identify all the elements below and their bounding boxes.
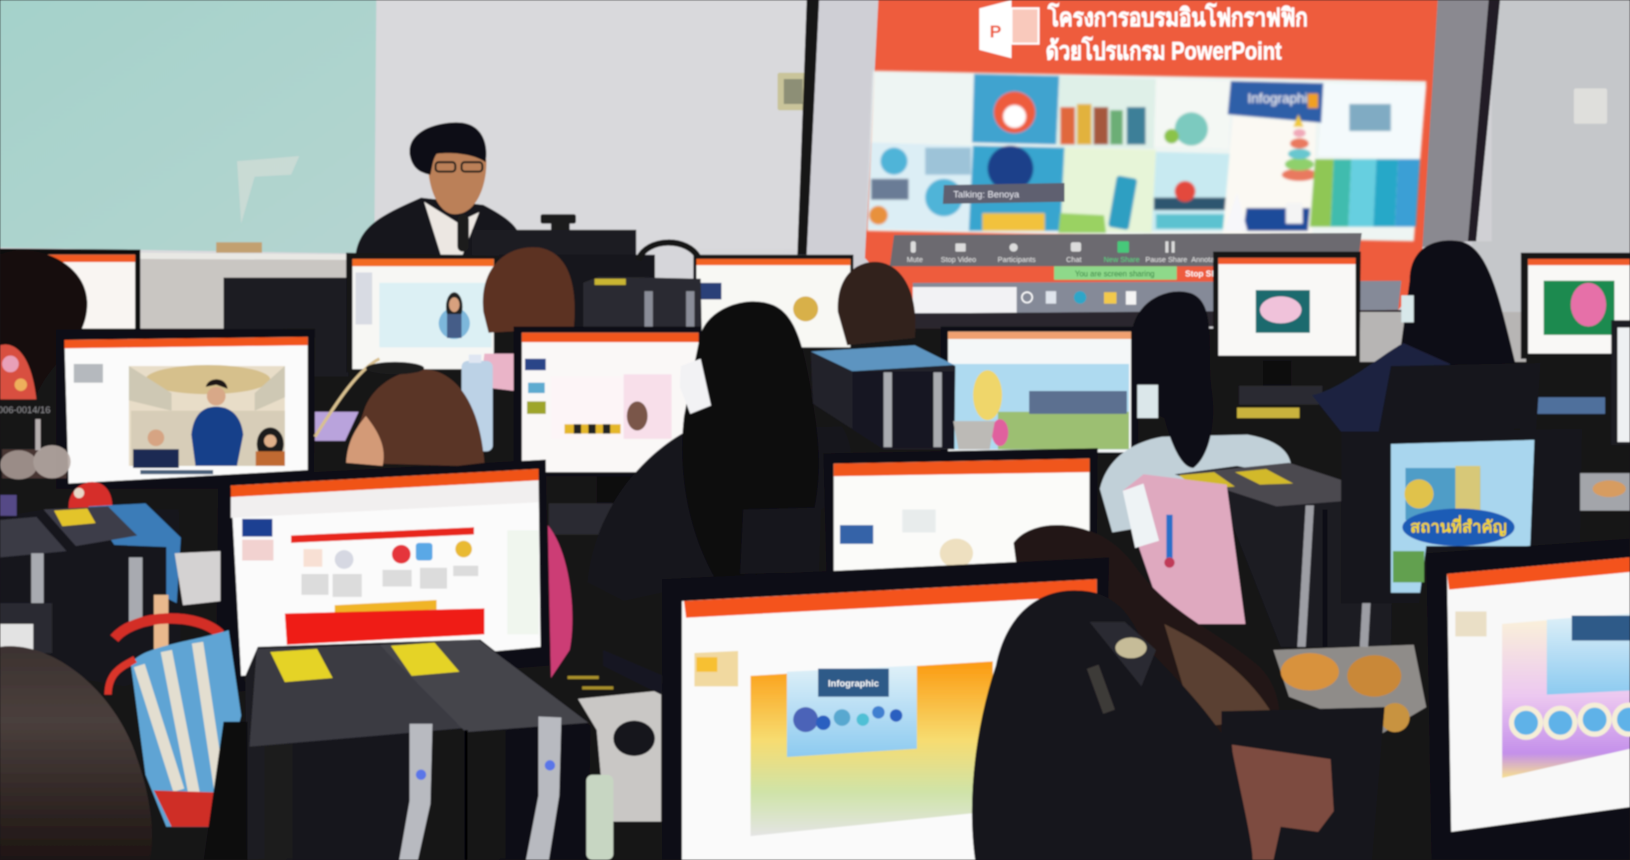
monitor centre with yellow barrier slide xyxy=(514,327,702,535)
pink sleeve xyxy=(548,525,572,678)
right-edge desk pastry xyxy=(1580,473,1630,511)
shirt xyxy=(424,202,479,255)
front woman with hair clip xyxy=(972,590,1253,860)
rear monitor left xyxy=(0,249,140,331)
chair behind front woman xyxy=(1221,707,1385,860)
Zoom meeting toolbar: Mute xyxy=(907,255,923,264)
woman with brown hair and sunglasses xyxy=(346,362,484,466)
monitor with Thai landmark slide: สถานที่สำคัญ xyxy=(1410,514,1507,537)
front centre monitor xyxy=(662,557,1109,860)
Zoom meeting toolbar: Stop Video xyxy=(941,255,976,264)
wall controller xyxy=(1574,88,1607,124)
computer tower behind centre monitor xyxy=(583,277,702,327)
wall thermostat xyxy=(778,73,806,110)
glasses xyxy=(436,162,482,172)
monitor with flight attendant image xyxy=(56,329,315,489)
monitor stand left of towers xyxy=(204,722,247,860)
hair xyxy=(409,122,486,175)
rear monitor centre xyxy=(693,255,853,354)
rear desk area shadow xyxy=(0,278,1630,860)
PowerPoint logo xyxy=(979,0,1039,58)
neck and face xyxy=(428,140,487,214)
woman seated at rear centre-left xyxy=(480,247,575,391)
projection screen surround xyxy=(797,0,1500,317)
woman in light-blue top with ponytail xyxy=(1100,291,1291,532)
drink cups and coffee xyxy=(0,419,71,479)
monitor with infographic icons xyxy=(216,460,549,692)
yellow floor tape xyxy=(568,676,613,689)
rear monitor right with flower xyxy=(1521,253,1630,445)
monitor with Thai landmark slide xyxy=(1341,428,1582,603)
computer towers centre xyxy=(811,345,955,449)
front right monitor xyxy=(1426,539,1630,860)
infographic collage xyxy=(867,71,1426,241)
screen sharing notice: Stop Share xyxy=(1185,269,1229,279)
woman at far left xyxy=(0,250,87,400)
suit xyxy=(356,198,520,256)
microphone xyxy=(457,214,469,252)
striped shopping bag xyxy=(108,595,241,827)
bag in mid-left xyxy=(315,359,379,441)
monitor with city collage xyxy=(941,327,1138,454)
Zoom meeting toolbar: Annotate xyxy=(1191,255,1220,264)
PowerPoint logo: P xyxy=(990,21,1002,41)
instructor xyxy=(356,122,520,256)
paper cup xyxy=(953,421,995,449)
computer towers mid-right xyxy=(1175,463,1393,647)
woman in black with long hair xyxy=(587,301,851,601)
slide title xyxy=(1046,2,1308,65)
water bottle xyxy=(462,355,493,451)
whiteboard xyxy=(0,0,376,260)
Zoom meeting toolbar xyxy=(890,233,1362,266)
computer towers far left xyxy=(0,495,181,686)
head foreground left xyxy=(0,646,152,860)
office chair right xyxy=(1378,363,1541,433)
woman with long hair behind front monitor xyxy=(1014,525,1279,749)
Zoom meeting toolbar: Pause Share xyxy=(1145,255,1187,264)
webcam and teacher monitor xyxy=(472,214,699,328)
desk surface and mouse xyxy=(578,690,661,860)
screen sharing notice xyxy=(1054,266,1229,280)
Zoom meeting toolbar: Chat xyxy=(1066,255,1082,264)
projected slide xyxy=(865,0,1438,314)
Windows taskbar on projection xyxy=(913,281,1401,314)
front centre monitor: Infographic xyxy=(828,678,879,688)
light pink parcel xyxy=(1123,474,1245,624)
Talking indicator xyxy=(943,183,1064,204)
rear monitor with lotus image xyxy=(1213,252,1361,418)
Zoom meeting toolbar: Participants xyxy=(998,255,1036,264)
slide title: โครงการอบรมอินโฟกราฟฟิก xyxy=(1047,2,1308,32)
rear monitor with woman portrait xyxy=(346,253,499,372)
projector bottom edge xyxy=(832,310,1403,331)
red helmet xyxy=(69,482,112,510)
pastry boxes on desk xyxy=(1273,645,1426,733)
infographic collage: Infographic xyxy=(1247,91,1314,106)
woman seated at rear right xyxy=(1312,240,1516,432)
large computer towers foreground xyxy=(245,640,590,860)
Zoom meeting toolbar: New Share xyxy=(1104,255,1140,264)
Talking indicator: Talking: Benoya xyxy=(953,190,1020,200)
monitor with small image xyxy=(823,448,1098,574)
woman seated at rear centre xyxy=(838,262,915,345)
chair in centre xyxy=(603,507,821,695)
plastic bags on desk xyxy=(175,551,220,605)
screen sharing notice: You are screen sharing xyxy=(1075,270,1155,279)
slide title: ด้วยโปรแกรม PowerPoint xyxy=(1046,35,1282,65)
